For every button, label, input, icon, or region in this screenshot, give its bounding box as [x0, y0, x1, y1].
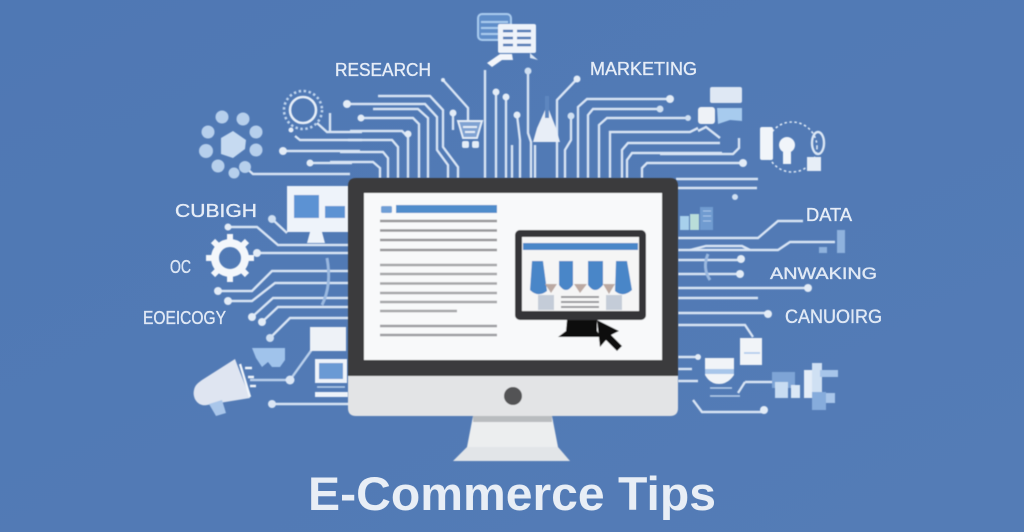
- label: research: RESEARCH: [335, 60, 431, 80]
- icon: megaphone: [194, 359, 256, 416]
- label: canuoirg: CANUOIRG: [785, 307, 882, 328]
- icon: block cluster: [772, 363, 838, 410]
- icon: desktop window: [287, 186, 349, 243]
- title: E-Commerce Tips: [308, 467, 716, 520]
- circuit traces: right: [676, 179, 835, 414]
- icon: gear: [206, 234, 254, 282]
- icon: bowl: [705, 358, 740, 396]
- icon: shopping cart: [458, 121, 482, 148]
- label: eoeicogy: EOEICOGY: [143, 307, 226, 328]
- circuit traces: top right: [578, 95, 747, 178]
- icon: document right: [740, 338, 762, 365]
- article text: [380, 205, 497, 335]
- icon: flask: [533, 96, 560, 142]
- icon: magnifier ring: [284, 91, 322, 132]
- circuit traces: top centre: [441, 68, 580, 178]
- cursor arrow: [597, 320, 622, 351]
- icon: bar blocks: [680, 207, 713, 230]
- circuit traces: top left: [245, 96, 458, 178]
- circuit traces: left: [214, 215, 350, 408]
- label: small glyphs: OC: [170, 257, 191, 277]
- icon: laptop: [315, 359, 348, 397]
- icon: blue map shape: [252, 348, 285, 367]
- icon: pale card: [310, 327, 346, 351]
- label: anwaking: ANWAKING: [770, 265, 877, 283]
- icon: hexagon cluster: [199, 110, 262, 178]
- label: marketing: MARKETING: [590, 59, 697, 79]
- monitor: [348, 178, 678, 461]
- monitor screen: [364, 193, 662, 360]
- icon: chat bubbles right: [698, 87, 742, 124]
- awning: [530, 261, 632, 294]
- monitor body: [348, 178, 678, 416]
- icon: speech bubbles: [478, 14, 538, 67]
- monitor stand: [453, 416, 570, 461]
- label: cubigh: CUBIGH: [175, 200, 257, 221]
- icon: data small card: [819, 230, 845, 253]
- mini storefront monitor: [515, 230, 646, 337]
- label: data: DATA: [806, 204, 853, 225]
- circuit network: [194, 14, 845, 416]
- icon: people cluster: [760, 122, 824, 172]
